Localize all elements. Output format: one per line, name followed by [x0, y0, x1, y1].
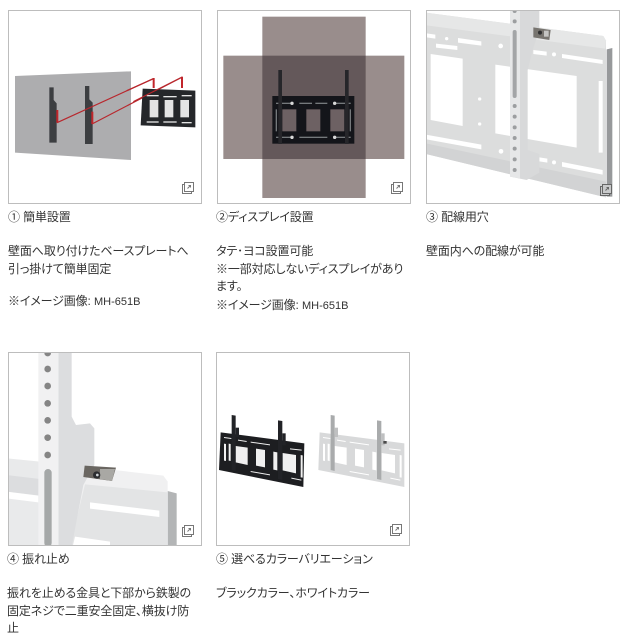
heading 1: ① 簡単設置	[8, 210, 71, 224]
white mount	[318, 415, 404, 487]
landscape display	[223, 56, 404, 159]
red vertical markers	[57, 77, 182, 124]
left plate	[7, 458, 40, 547]
vertical rail	[510, 7, 539, 180]
description 2: タテ･ヨコ設置可能	[216, 244, 313, 258]
description 4: 固定ネジで二重安全固定、横抜け防	[7, 604, 189, 618]
right plate	[70, 465, 168, 547]
icon: enlarge	[392, 182, 402, 194]
black mount	[141, 89, 195, 127]
description 4: 振れを止める金具と下部から鉄製の	[7, 586, 191, 600]
plate openings	[426, 33, 603, 175]
description 4	[7, 586, 191, 635]
heading 5: ⑤ 選べるカラーバリエーション	[216, 552, 373, 566]
black mount	[219, 415, 304, 487]
note 1: ※イメージ画像: MH-651B	[8, 294, 140, 308]
icon: enlarge	[182, 526, 194, 536]
base brackets	[49, 86, 93, 144]
right flange	[607, 48, 612, 197]
white plate	[426, 13, 606, 197]
anti-sway clip	[83, 466, 116, 481]
red guide lines	[57, 77, 182, 124]
description 4: 止	[7, 621, 19, 635]
panel 4: anti-sway stopper image	[8, 352, 202, 546]
panel 1: easy installation image	[8, 10, 202, 204]
panel 5: color variation image	[216, 352, 410, 546]
description 5: ブラックカラー、ホワイトカラー	[216, 586, 370, 600]
description 2: ※一部対応しないディスプレイがあり	[216, 262, 403, 276]
heading 4: ④ 振れ止め	[7, 552, 70, 566]
panel 2: display orientation image	[217, 10, 411, 204]
black mount with rails	[272, 70, 354, 144]
icon: enlarge	[390, 524, 402, 536]
display wall plate	[15, 71, 131, 160]
description 1	[8, 244, 188, 276]
description 1: 壁面へ取り付けたベースプレートへ	[8, 244, 188, 258]
icon: enlarge	[600, 184, 612, 196]
icon: enlarge	[182, 182, 194, 194]
description 2	[216, 244, 403, 293]
anti-sway clip	[533, 27, 551, 40]
heading 3: ③ 配線用穴	[426, 210, 489, 224]
right flange	[168, 491, 177, 547]
display overlap	[262, 56, 366, 159]
description 2: ます。	[216, 279, 242, 293]
description 3: 壁面内への配線が可能	[426, 244, 544, 258]
portrait display	[262, 17, 366, 198]
description 1: 引っ掛けて簡単固定	[8, 262, 111, 276]
panel 3: cable hole image	[426, 10, 620, 204]
note 2: ※イメージ画像: MH-651B	[216, 298, 348, 312]
vertical rail	[38, 350, 94, 547]
heading 2: ②ディスプレイ設置	[216, 210, 314, 224]
red overlay across mount	[127, 77, 182, 102]
